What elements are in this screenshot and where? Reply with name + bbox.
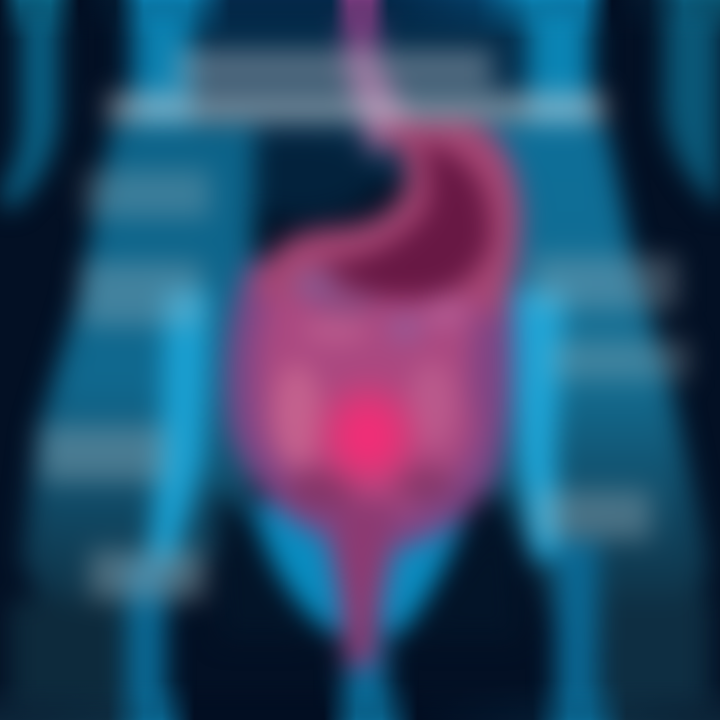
upper torso [125, 0, 595, 180]
stomach interior [318, 142, 490, 299]
left body column [22, 125, 255, 640]
left lower leg strip [126, 560, 166, 720]
title line 1 [176, 50, 492, 86]
inflamed hot spot [308, 372, 428, 500]
intestine body [258, 298, 485, 526]
intestine gap shade right [410, 490, 520, 640]
upper right arm strip [664, 0, 720, 212]
left labels (illegible in reference) [40, 170, 210, 600]
right body column [480, 125, 708, 640]
bottom edge band [0, 689, 720, 720]
left pelvis wedge [250, 500, 342, 640]
label 3 [40, 426, 168, 482]
rectum [334, 500, 398, 655]
upper left torso strip [134, 0, 192, 140]
right pelvis wedge [380, 500, 472, 640]
esophagus [342, 0, 416, 155]
lower spine [344, 640, 388, 720]
left lower leg shade [10, 600, 125, 720]
intestine folds [273, 271, 498, 510]
label 5 [532, 256, 678, 310]
left bright edge [146, 290, 210, 570]
digestive tract [226, 0, 522, 668]
top edge band [2, 0, 720, 34]
stomach [252, 122, 522, 335]
right labels (illegible in reference) [532, 256, 690, 540]
torso cavity [225, 138, 375, 218]
title block (illegible in reference) [108, 50, 606, 123]
upper left arm strip [0, 0, 58, 212]
upper right torso strip [528, 0, 590, 140]
title line 2 [108, 93, 606, 123]
label 6 [550, 340, 690, 380]
label 4 [90, 550, 206, 600]
label 1 [84, 170, 210, 218]
intestine gap shade left [215, 490, 310, 640]
label 7 [535, 490, 651, 540]
right lower leg shade [600, 600, 710, 720]
right lower leg strip [556, 540, 598, 720]
right bright edge [514, 290, 566, 560]
label 2 [80, 262, 202, 326]
intestine outline [226, 260, 512, 668]
